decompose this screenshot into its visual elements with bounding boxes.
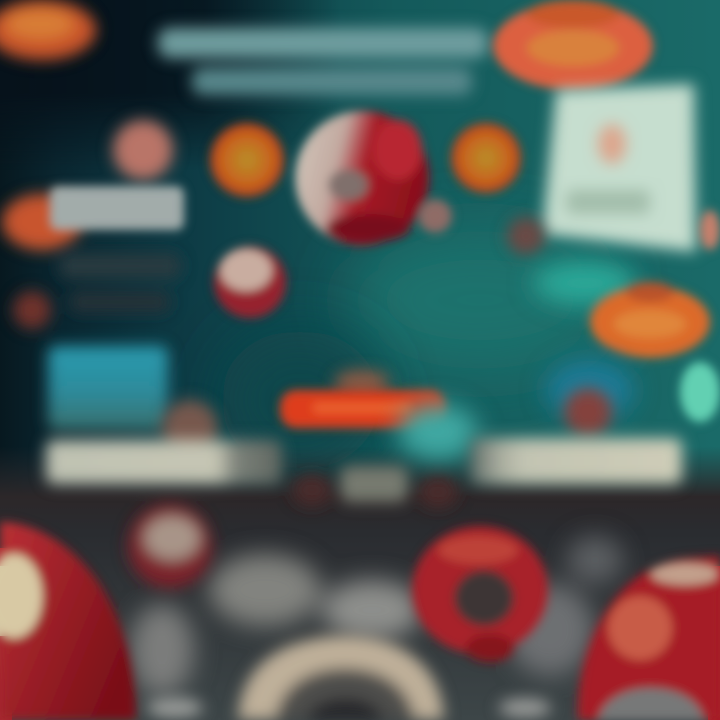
dark band reddish spots	[292, 474, 458, 508]
teal glow centre right	[398, 404, 478, 460]
small ball under card	[507, 217, 545, 255]
top right orange lantern	[493, 0, 653, 90]
blue panel left	[48, 346, 168, 430]
bottom centre eye ball	[238, 636, 444, 720]
mint pill right edge	[680, 362, 720, 422]
bottom grey blobs	[130, 536, 623, 696]
bottom small ball left	[128, 504, 212, 588]
orange badge right	[451, 123, 521, 193]
bottom right large red ball	[578, 556, 720, 720]
teal glow right	[533, 261, 637, 305]
left orange label with pale bar	[2, 186, 184, 250]
right edge ball	[700, 210, 720, 250]
small ball top left	[113, 120, 173, 180]
left pale bar	[46, 440, 282, 484]
orange central button	[280, 370, 446, 428]
orange badge left	[210, 123, 284, 197]
bottom centre-right red ball	[412, 526, 548, 662]
small ball beside centre	[418, 199, 452, 233]
top left orange lantern	[0, 0, 96, 60]
mid left ball	[214, 246, 286, 318]
pale card right	[542, 84, 696, 252]
central red ball	[295, 111, 429, 245]
bottom left large red ball	[0, 522, 136, 720]
right pale bar	[470, 438, 682, 484]
bottom edge pale blobs	[147, 698, 551, 718]
small red dot left	[13, 291, 51, 329]
centre pale chip	[340, 466, 408, 502]
blue glow and small ball right	[546, 360, 634, 436]
orange lantern right	[590, 282, 710, 358]
small ball above left bar	[162, 400, 218, 456]
edge anchors for shapes touching the frame	[0, 548, 720, 720]
heading (blurred title lines)	[158, 28, 488, 95]
left dim text rows	[60, 254, 180, 312]
